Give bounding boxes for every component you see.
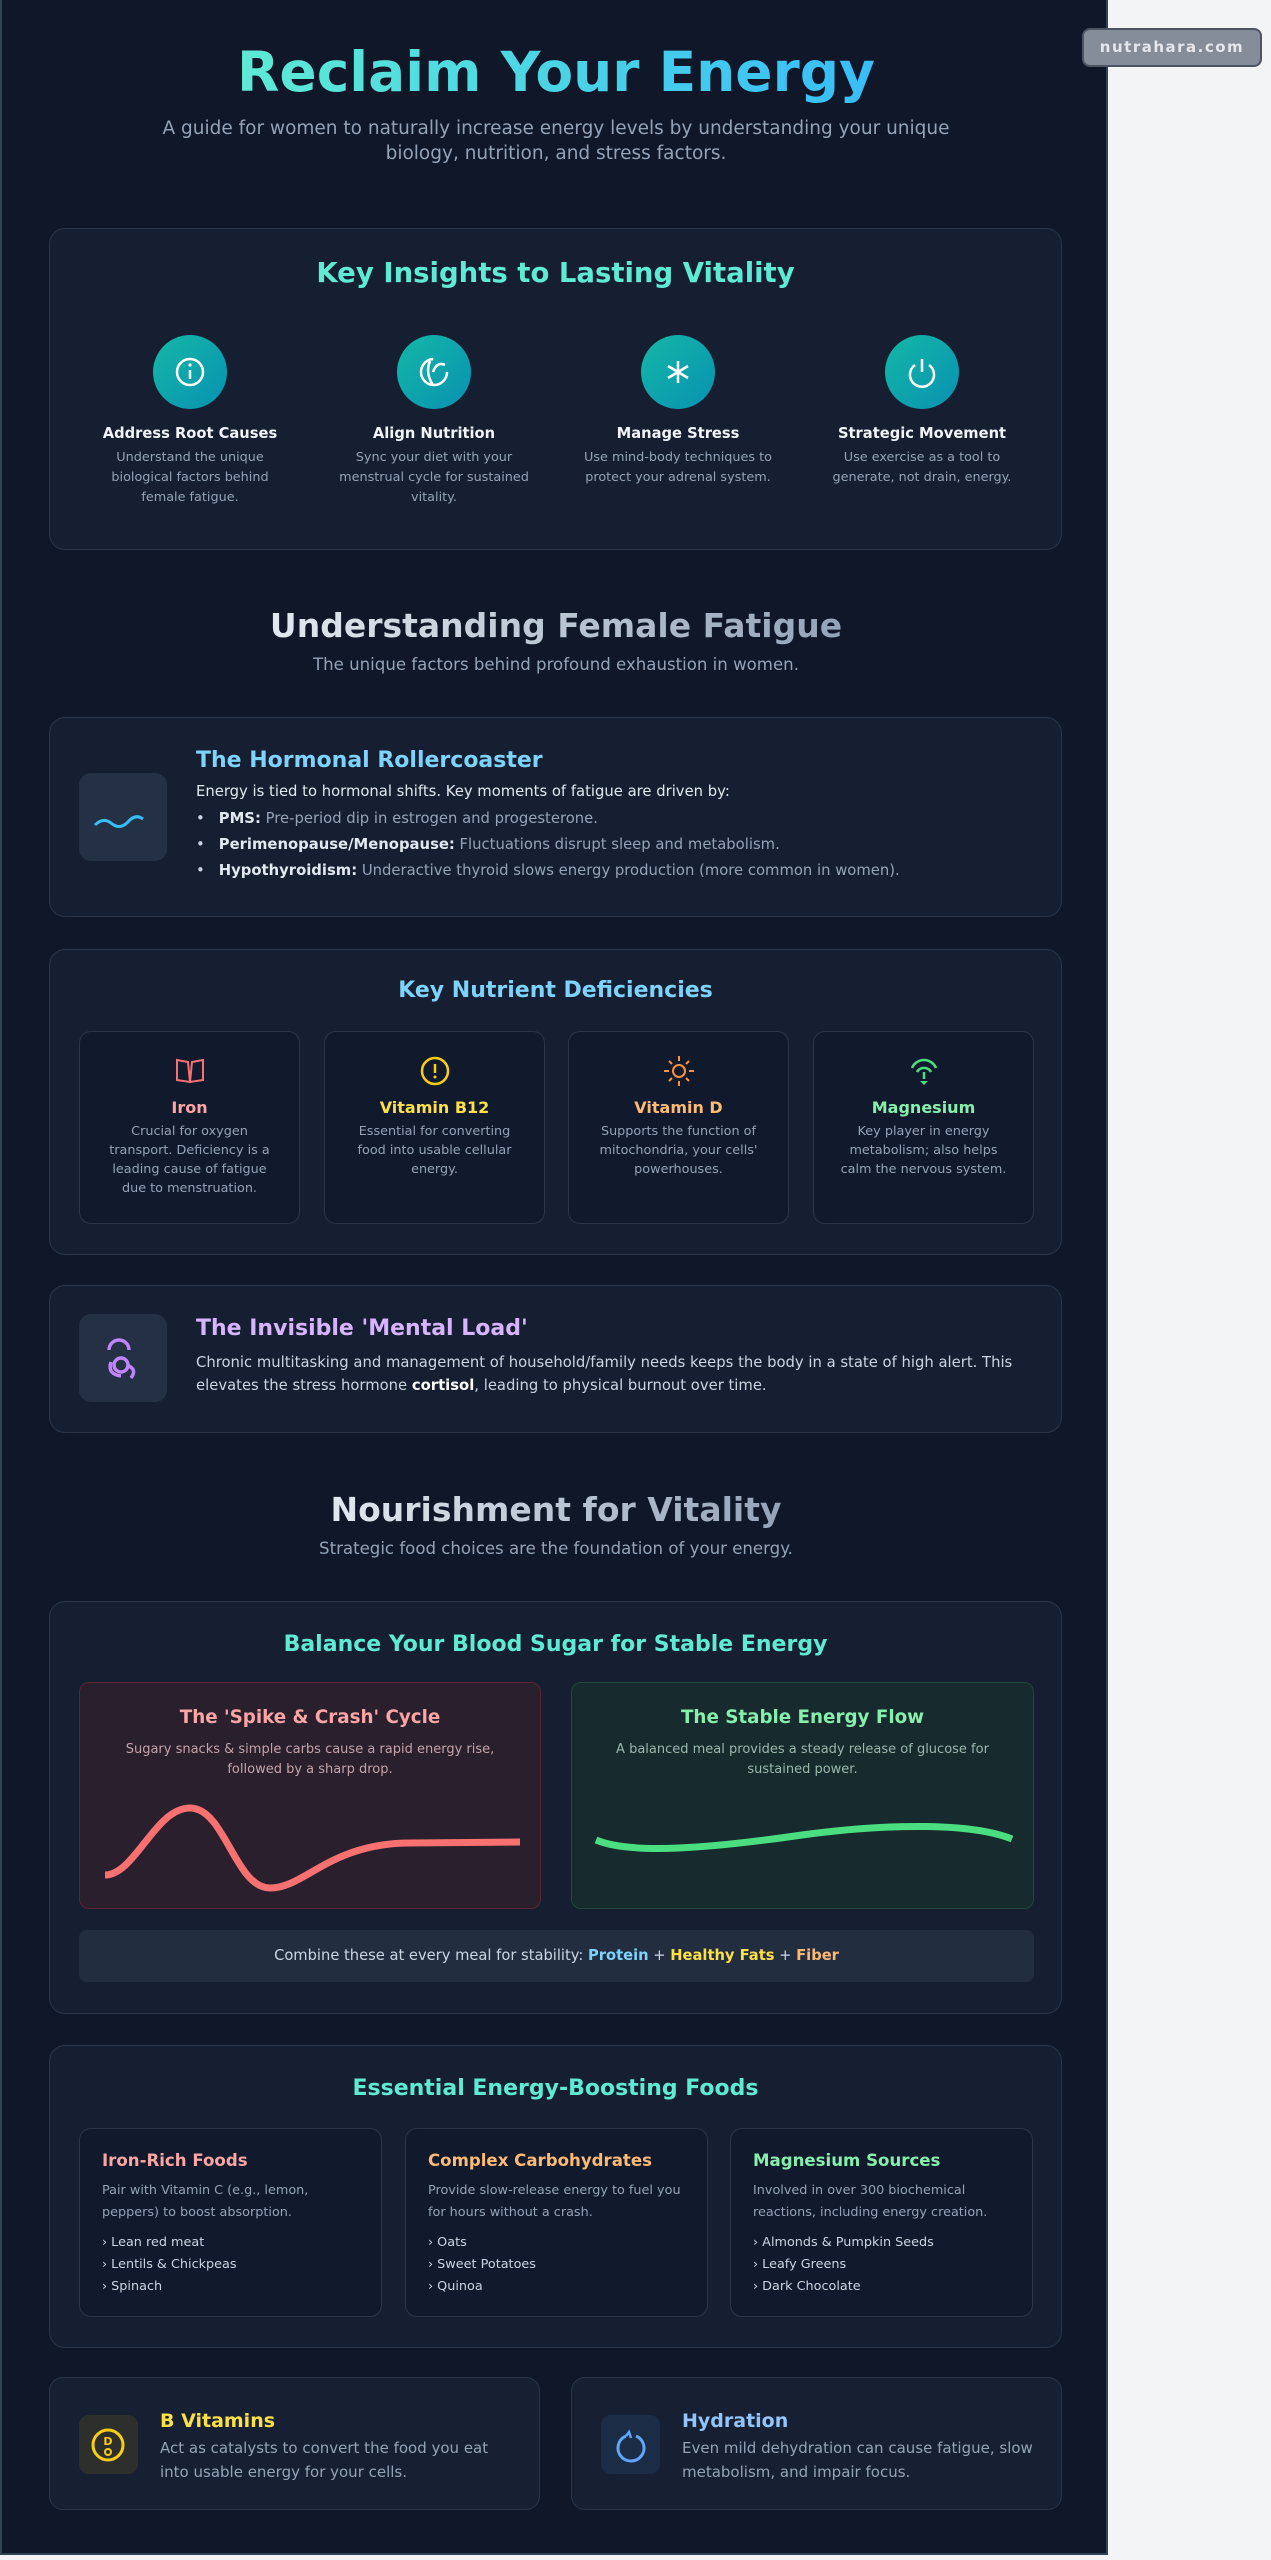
- heading: foods: Essential Energy-Boosting Foods: [352, 2076, 758, 2101]
- card: iron-rich foods: › Lentils & Chickpeas: [102, 2257, 237, 2272]
- text: hydration: [682, 2410, 1033, 2481]
- text: hydration: Hydration: [682, 2410, 788, 2432]
- card: iron: [79, 1031, 300, 1224]
- card: magnesium: Key player in energy metabolism; also helps calm the nervous system.: [841, 1124, 1006, 1177]
- text: b vitamins: B Vitamins: [160, 2410, 275, 2432]
- card: b vitamins: [49, 2377, 540, 2510]
- text: hormonal: • Hypothyroidism: Underactive thyroid slows energy production (more common in women).: [196, 862, 900, 879]
- insight: movement: Use exercise as a tool to generate, not drain, energy.: [832, 450, 1012, 485]
- text: hormonal: [196, 748, 900, 879]
- icon: mental load: [79, 1314, 167, 1402]
- card: iron: Crucial for oxygen transport. Deficiency is a leading cause of fatigue due to menstruation.: [109, 1124, 270, 1196]
- text: mental load: [196, 1316, 1012, 1394]
- panel: essential foods: [49, 2045, 1062, 2348]
- panel: mental load: [49, 1285, 1062, 1433]
- insight: nutrition: Align Nutrition: [373, 425, 495, 442]
- card: spike and crash: The 'Spike & Crash' Cycle: [180, 1707, 440, 1728]
- section heading: understanding female fatigue: Understanding Female Fatigue: [270, 606, 842, 645]
- text: hormonal: Energy is tied to hormonal shifts. Key moments of fatigue are driven by:: [196, 783, 730, 800]
- badge: nutrahara.com: [1082, 28, 1262, 67]
- card: b12: Essential for converting food into usable cellular energy.: [358, 1124, 511, 1177]
- card: iron-rich foods: Iron-Rich Foods: [102, 2151, 248, 2170]
- card: magnesium sources: Magnesium Sources: [753, 2151, 940, 2170]
- text: mental load: The Invisible 'Mental Load': [196, 1316, 528, 1341]
- panel: hormonal rollercoaster: [49, 717, 1062, 917]
- card: magnesium sources: Involved in over 300 biochemical reactions, including energy creation.: [753, 2183, 987, 2220]
- card: b12: Vitamin B12: [380, 1098, 489, 1117]
- card: complex carbs: › Quinoa: [428, 2279, 483, 2294]
- card: magnesium: Magnesium: [872, 1098, 975, 1117]
- heading: nutrients: Key Nutrient Deficiencies: [398, 978, 713, 1003]
- panel: blood sugar: [49, 1601, 1062, 2014]
- card: complex carbs: › Oats: [428, 2235, 467, 2250]
- callout: combine: [79, 1930, 1034, 1982]
- icon: b vitamins: [79, 2415, 138, 2474]
- panel: nutrient deficiencies: [49, 949, 1062, 1255]
- text: hormonal: • Perimenopause/Menopause: Fluctuations disrupt sleep and metabolism.: [196, 836, 780, 853]
- insight: movement: [832, 335, 1012, 485]
- card: complex carbs: › Sweet Potatoes: [428, 2257, 536, 2272]
- card: stable flow: [571, 1682, 1034, 1909]
- section subtitle: The unique factors behind profound exhaustion in women.: [313, 655, 799, 674]
- card: stable flow: The Stable Energy Flow: [681, 1707, 924, 1728]
- card: iron-rich foods: › Spinach: [102, 2279, 162, 2294]
- insight: stress: [584, 335, 772, 485]
- heading: blood sugar: Balance Your Blood Sugar for Stable Energy: [284, 1632, 827, 1657]
- chart: stable curve: [594, 1823, 1014, 1852]
- card: iron-rich foods: › Lean red meat: [102, 2235, 204, 2250]
- insight: stress: Use mind-body techniques to protect your adrenal system.: [584, 450, 772, 485]
- card: iron-rich foods: [79, 2128, 382, 2317]
- insight: nutrition: [339, 335, 529, 505]
- card: iron: Iron: [171, 1098, 208, 1117]
- card: magnesium sources: [730, 2128, 1033, 2317]
- card: iron-rich foods: Pair with Vitamin C (e.g., lemon, peppers) to boost absorption.: [102, 2183, 308, 2220]
- text: hormonal: The Hormonal Rollercoaster: [196, 748, 543, 773]
- text: b vitamins: Act as catalysts to convert the food you eat into usable energy for your cells.: [160, 2439, 488, 2481]
- insight: nutrition: Sync your diet with your menstrual cycle for sustained vitality.: [339, 450, 529, 505]
- insight: root causes: Address Root Causes: [103, 425, 277, 442]
- insight: root causes: [102, 335, 277, 505]
- card: hydration: [571, 2377, 1062, 2510]
- card: complex carbs: Provide slow-release energy to fuel you for hours without a crash.: [428, 2183, 681, 2220]
- chart: spike curve: [105, 1804, 520, 1892]
- badge: nutrahara.com: nutrahara.com: [1100, 38, 1244, 56]
- card: vitamin d: Supports the function of mitochondria, your cells' powerhouses.: [600, 1124, 757, 1177]
- card: spike and crash: [79, 1682, 541, 1909]
- text: hormonal: • PMS: Pre-period dip in estrogen and progesterone.: [196, 810, 598, 827]
- card: magnesium: [813, 1031, 1034, 1224]
- card: b12: [324, 1031, 545, 1224]
- card: stable flow: A balanced meal provides a steady release of glucose for sustained power.: [616, 1742, 989, 1777]
- icon: b vitamins: D: [103, 2435, 113, 2448]
- text: b vitamins: [160, 2410, 488, 2481]
- card: complex carbs: [405, 2128, 708, 2317]
- panel: key insights: [49, 228, 1062, 550]
- insight: movement: Strategic Movement: [838, 425, 1006, 442]
- icon: wave: [79, 773, 167, 861]
- insight: stress: Manage Stress: [617, 425, 739, 442]
- section heading: nourishment: Nourishment for Vitality: [330, 1490, 782, 1529]
- card: vitamin d: [568, 1031, 789, 1224]
- heading: key insights: Key Insights to Lasting Vitality: [316, 257, 795, 289]
- icon: water: [601, 2415, 660, 2474]
- callout: combine: Combine these at every meal for stability: Protein + Healthy Fats + Fiber: [274, 1947, 839, 1964]
- card: complex carbs: Complex Carbohydrates: [428, 2151, 652, 2170]
- section subtitle: Strategic food choices are the foundation of your energy.: [319, 1539, 793, 1558]
- card: magnesium sources: › Leafy Greens: [753, 2257, 846, 2272]
- card: vitamin d: Vitamin D: [634, 1098, 723, 1117]
- card: magnesium sources: › Dark Chocolate: [753, 2279, 861, 2294]
- text: mental load: Chronic multitasking and management of household/family needs keeps the body in a state of high alert. This elevates the stress hormone cortisol, leading to physical burnout over time.: [196, 1354, 1012, 1394]
- insight: root causes: Understand the unique biological factors behind female fatigue.: [111, 450, 269, 505]
- card: spike and crash: Sugary snacks & simple carbs cause a rapid energy rise, followed by a sharp drop.: [126, 1742, 494, 1777]
- subtitle: A guide for women to naturally increase energy levels by understanding your unique biology, nutrition, and stress factors.: [162, 118, 950, 164]
- card: magnesium sources: › Almonds & Pumpkin Seeds: [753, 2235, 934, 2250]
- title: Reclaim Your Energy: [237, 40, 875, 104]
- text: hydration: Even mild dehydration can cause fatigue, slow metabolism, and impair focus.: [682, 2439, 1033, 2481]
